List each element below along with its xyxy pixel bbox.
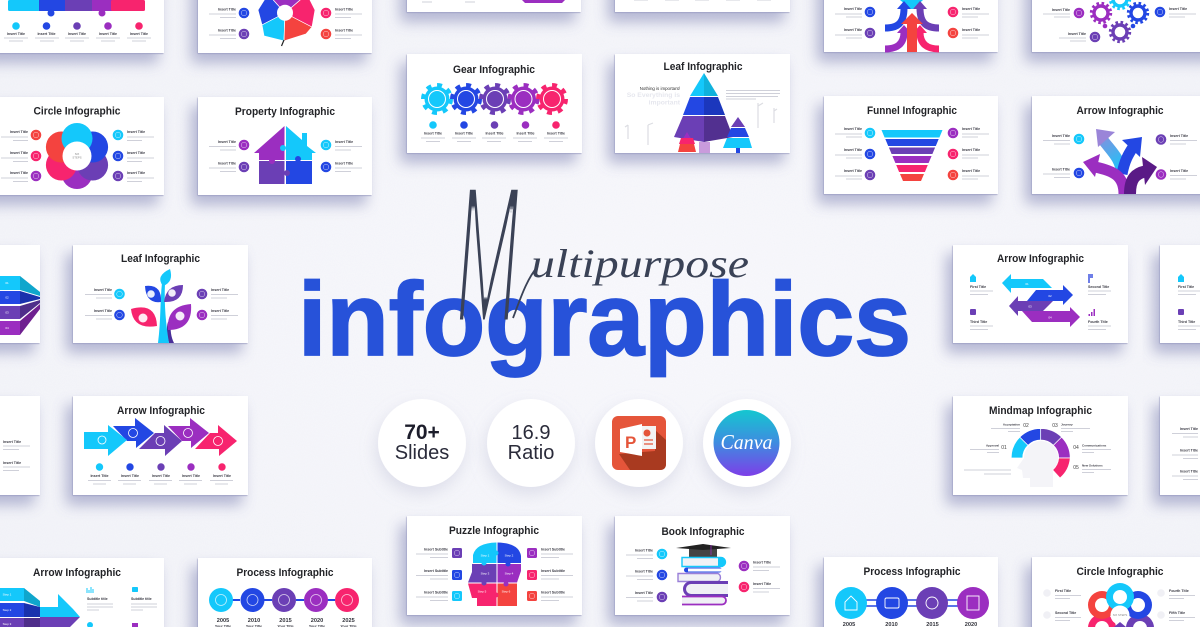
head silhouette xyxy=(1017,441,1058,487)
slide card xyxy=(1160,245,1200,343)
years: 2015 xyxy=(279,618,292,624)
callout text: So Everything is xyxy=(627,92,680,99)
panel: circle infographic slide xyxy=(0,97,164,195)
list items: Insert Title xyxy=(753,560,771,564)
slide card xyxy=(953,245,1128,343)
callout text: important xyxy=(649,100,681,106)
list items xyxy=(1,130,154,182)
panel: gears slide (top right corner) xyxy=(1032,0,1200,52)
panel: leaf (tree) infographic slide xyxy=(615,54,790,153)
slide card xyxy=(73,245,248,343)
list items: Insert Title xyxy=(635,570,653,574)
list items: Insert Title xyxy=(962,7,980,11)
list items: Insert Title xyxy=(962,28,980,32)
list items xyxy=(88,463,233,484)
gear row xyxy=(423,85,566,113)
heading: Arrow Infographic xyxy=(117,405,205,417)
list items xyxy=(421,121,568,142)
heading: Mindmap Infographic xyxy=(989,405,1092,417)
graduation cap xyxy=(676,544,731,557)
petal chart xyxy=(46,123,108,189)
corner items: Third Title xyxy=(970,320,987,324)
labels: 01 xyxy=(1001,445,1007,451)
labels: 04 xyxy=(1073,445,1079,451)
puzzle head: Step 1 xyxy=(481,554,490,558)
arrow flower: SIX STEPS xyxy=(1113,613,1127,617)
list items: Insert Title xyxy=(218,162,236,166)
labels xyxy=(964,422,1111,474)
list items: Insert Title xyxy=(335,28,353,32)
slide card xyxy=(198,97,372,195)
slide card xyxy=(1160,396,1200,495)
panel: property infographic slide xyxy=(198,97,372,195)
slide card xyxy=(407,0,581,12)
list items: Insert Title xyxy=(127,171,145,175)
years: 2010 xyxy=(248,618,260,624)
list items: Insert Title xyxy=(127,130,145,134)
list text: Insert Title xyxy=(3,461,21,465)
list items xyxy=(209,8,362,39)
list items: Insert Title xyxy=(213,474,231,478)
puzzle head: Step 3 xyxy=(481,572,490,576)
corner items: Second Title xyxy=(1088,285,1109,289)
stacked bands: 04 xyxy=(5,326,9,330)
opposing arrows xyxy=(1002,274,1080,327)
labels: Journey xyxy=(1061,422,1073,426)
caption lines xyxy=(634,0,771,1)
panel: 3D step fragment (left edge) xyxy=(0,245,40,343)
labels: Communications xyxy=(1082,444,1107,448)
list items: Fourth Title xyxy=(1169,589,1189,593)
opposing arrows: 01 xyxy=(1025,282,1029,286)
list items: Insert Title xyxy=(10,171,28,175)
slide card xyxy=(73,396,248,495)
list items: Insert Title xyxy=(1170,134,1188,138)
list items xyxy=(209,140,362,172)
badge: Canva icon xyxy=(703,399,791,487)
list items: Insert Title xyxy=(130,32,148,36)
process circles xyxy=(209,588,359,612)
heading: Leaf Infographic xyxy=(664,61,742,73)
list items: Insert Title xyxy=(10,130,28,134)
script capital: M xyxy=(456,148,520,361)
heading: Circle Infographic xyxy=(34,106,120,118)
heading: Property Infographic xyxy=(235,106,335,118)
petal chart: STEPS xyxy=(72,156,82,160)
list items: Insert Title xyxy=(962,127,980,131)
labels: Approval xyxy=(986,444,999,448)
petal chart: SIX xyxy=(75,152,79,156)
process circles xyxy=(835,587,989,619)
corner items: Fourth Title xyxy=(1088,320,1108,324)
labels: Acceptation xyxy=(1003,422,1020,426)
slide card xyxy=(824,96,998,194)
fork arrows xyxy=(1083,129,1157,194)
slide card xyxy=(0,396,40,495)
list items: First Title xyxy=(1055,589,1071,593)
list items xyxy=(85,288,238,320)
sub-items xyxy=(87,587,157,627)
list items: Insert Title xyxy=(218,28,236,32)
panel: puzzle infographic slide xyxy=(407,516,582,615)
list text: Insert Title xyxy=(1180,448,1198,452)
list items: Insert Title xyxy=(7,32,25,36)
square list items xyxy=(416,548,573,601)
panel: arrow slide fragment (right edge) xyxy=(1160,245,1200,343)
list text: Insert Title xyxy=(1180,427,1198,431)
list items xyxy=(835,7,989,38)
step arrow: Step 1 xyxy=(3,592,12,596)
years xyxy=(215,618,357,627)
callout text: Nothing is important/ xyxy=(640,86,681,91)
slide card xyxy=(0,245,40,343)
plant chart xyxy=(131,269,191,343)
labels: 05 xyxy=(1073,465,1079,471)
small left tree xyxy=(678,132,696,152)
small right tree xyxy=(723,117,752,153)
square list items: Insert Subtitle xyxy=(424,590,448,594)
converging arrows xyxy=(885,0,939,52)
panel: leaf infographic slide (plant) xyxy=(73,245,248,343)
step arrow xyxy=(0,588,80,627)
list items: Insert Title xyxy=(121,474,139,478)
list items: Insert Title xyxy=(1169,7,1187,11)
book stack xyxy=(678,558,728,604)
leaf wheel chart xyxy=(258,0,315,46)
labels: 03 xyxy=(1052,423,1058,429)
opposing arrows: 02 xyxy=(1048,294,1052,298)
heading: Funnel Infographic xyxy=(867,105,957,117)
heading: Process Infographic xyxy=(236,567,334,579)
house puzzle xyxy=(254,126,316,184)
panel: arrows-up slide (top right) xyxy=(824,0,998,52)
years: 2025 xyxy=(342,618,355,624)
list items: Insert Title xyxy=(1068,32,1086,36)
puzzle head: Step 6 xyxy=(502,590,511,594)
badge: 16.9 ratio: Ratio xyxy=(508,442,554,464)
badge: 16.9 ratio xyxy=(487,399,575,487)
corner items xyxy=(970,274,1111,330)
list items: Insert Title xyxy=(1052,168,1070,172)
panel: puzzle row slide (top left) xyxy=(0,0,164,53)
badge: 70+ slides xyxy=(378,399,466,487)
list items: Insert Title xyxy=(211,288,229,292)
square list items: Insert Subtitle xyxy=(424,548,448,552)
list items: Insert Title xyxy=(844,148,862,152)
opposing arrows: 04 xyxy=(1048,316,1052,320)
list items: Insert Title xyxy=(1052,8,1070,12)
heading: Arrow Infographic xyxy=(1076,105,1164,117)
purple shape xyxy=(522,0,565,3)
list items xyxy=(1043,7,1196,42)
list items: Insert Title xyxy=(90,474,109,478)
list items: Insert Title xyxy=(94,309,112,313)
heading: Puzzle Infographic xyxy=(449,525,539,537)
list items: Insert Title xyxy=(335,8,353,12)
panel: arrow infographic slide (bottom left) xyxy=(0,558,164,627)
list items: Insert Title xyxy=(94,288,112,292)
heading: Arrow Infographic xyxy=(33,567,121,579)
list items: Insert Title xyxy=(516,132,535,136)
slide card xyxy=(1032,557,1200,627)
slide card xyxy=(615,54,790,153)
panel: funnel infographic slide xyxy=(824,96,998,194)
list items: Insert Title xyxy=(962,169,980,173)
heading: Process Infographic xyxy=(864,566,960,578)
list items: Insert Title xyxy=(127,151,145,155)
panel: circle infographic slide (arrows) xyxy=(1032,557,1200,627)
square list items: Insert Subtitle xyxy=(541,590,565,594)
slide card xyxy=(824,0,998,52)
heading: Book Infographic xyxy=(662,526,744,538)
slide card xyxy=(407,54,582,153)
list items: Insert Title xyxy=(455,132,473,136)
list items: Insert Title xyxy=(10,151,28,155)
panel: leaf wheel slide (top) xyxy=(198,0,372,53)
slide card xyxy=(198,558,372,627)
list items: Insert Title xyxy=(753,582,771,586)
icon: PowerPoint tile: P xyxy=(625,433,636,452)
wind turbines xyxy=(625,103,777,145)
main heading: infographics: infographics xyxy=(298,262,911,378)
list items: Insert Title xyxy=(844,169,862,173)
puzzle head xyxy=(468,542,521,606)
labels: New Solutions xyxy=(1082,464,1103,468)
badge: PowerPoint icon xyxy=(595,399,683,487)
list items: Insert Title xyxy=(547,132,565,136)
list items xyxy=(1043,134,1197,180)
step arrow: Step 3 xyxy=(3,622,12,626)
slide card xyxy=(824,557,998,627)
heading: Gear Infographic xyxy=(453,64,535,76)
slide card xyxy=(953,396,1128,495)
stacked bands xyxy=(0,276,40,335)
large tree xyxy=(674,73,733,153)
list items: Insert Title xyxy=(635,548,653,552)
panel: arrow infographic slide (chevrons) xyxy=(73,396,248,495)
heading: Leaf Infographic xyxy=(121,253,200,265)
corner items: First Title xyxy=(1178,285,1194,289)
funnel chart xyxy=(882,130,942,181)
script remainder: ultipurpose xyxy=(531,241,749,286)
puzzle head: Step 5 xyxy=(478,590,487,594)
list items: Insert Title xyxy=(211,309,229,313)
puzzle row xyxy=(8,0,145,16)
sub-items: Subtitle title xyxy=(87,597,108,601)
slide card xyxy=(0,97,164,195)
list items: Insert Title xyxy=(218,8,236,12)
corner items: Third Title xyxy=(1178,320,1195,324)
panel: top centre slide fragment xyxy=(407,0,581,12)
list text: Insert Title xyxy=(3,440,21,444)
list items: Insert Title xyxy=(335,162,353,166)
heading: Circle Infographic xyxy=(1076,566,1164,578)
puzzle head: Step 4 xyxy=(505,572,514,576)
sub-items: Subtitle title xyxy=(131,597,152,601)
list items: Insert Title xyxy=(844,28,862,32)
slide card xyxy=(1032,96,1200,194)
list items: Insert Title xyxy=(335,140,353,144)
puzzle head: Step 2 xyxy=(505,554,514,558)
list items: Insert Title xyxy=(37,32,56,36)
slide card xyxy=(1032,0,1200,52)
description lines xyxy=(726,90,780,99)
list items: Insert Title xyxy=(424,132,442,136)
slide card xyxy=(0,558,164,627)
main heading: script word xyxy=(456,148,749,361)
caption lines xyxy=(422,1,475,3)
stacked bands: 03 xyxy=(5,310,9,314)
slide card xyxy=(407,516,582,615)
list items: Insert Title xyxy=(1052,134,1070,138)
years: 2020 xyxy=(311,618,323,624)
panel: book infographic slide xyxy=(615,516,790,615)
panel: process infographic slide (four steps) xyxy=(824,557,998,627)
list items: Insert Title xyxy=(1170,169,1188,173)
list items: Insert Title xyxy=(485,132,504,136)
list items: Insert Title xyxy=(152,474,170,478)
panel: arrow infographic slide (fork) xyxy=(1032,96,1200,194)
badge: Canva icon: Canva xyxy=(720,430,772,454)
chevron arrows xyxy=(84,418,237,456)
list items: Insert Title xyxy=(182,474,200,478)
labels: 02 xyxy=(1023,423,1029,429)
semicircle segments xyxy=(1011,428,1070,478)
heading: Arrow Infographic xyxy=(997,253,1084,265)
list text xyxy=(3,440,30,470)
panel: top centre right slide fragment xyxy=(615,0,790,12)
list items xyxy=(1043,589,1195,620)
square list items: Insert Subtitle xyxy=(541,569,565,573)
panel: mindmap infographic slide xyxy=(953,396,1128,495)
panel: text fragment (right edge) xyxy=(1160,396,1200,495)
connecting flourish xyxy=(513,266,538,318)
list items: Second Title xyxy=(1055,611,1076,615)
panel: text fragment (left edge) xyxy=(0,396,40,495)
list items xyxy=(4,22,151,41)
corner items: First Title xyxy=(970,285,986,289)
square list items: Insert Subtitle xyxy=(541,548,565,552)
stacked bands: 02 xyxy=(5,296,9,300)
badge: 16.9 ratio: 16.9 xyxy=(512,422,550,444)
panel: arrow infographic slide (opposing arrows) xyxy=(953,245,1128,343)
slide card xyxy=(0,0,164,53)
list items: Insert Title xyxy=(99,32,117,36)
slide card xyxy=(615,516,790,615)
gears xyxy=(1092,0,1148,42)
arrow flower xyxy=(1088,583,1154,627)
list items: Fifth Title xyxy=(1169,611,1185,615)
years: 2005 xyxy=(217,618,229,624)
stacked bands: 01 xyxy=(5,281,9,285)
list items: Insert Title xyxy=(68,32,86,36)
list items: Insert Title xyxy=(844,7,862,11)
square list items: Insert Subtitle xyxy=(424,569,448,573)
opposing arrows: 03 xyxy=(1028,304,1032,308)
list text: Insert Title xyxy=(1180,470,1198,474)
badge: 70+ slides: 70+ xyxy=(404,421,440,444)
callout text xyxy=(627,86,681,106)
years xyxy=(843,622,977,627)
list items: Insert Title xyxy=(218,140,236,144)
list text xyxy=(1172,427,1198,480)
list items xyxy=(835,127,989,180)
slide card xyxy=(198,0,372,53)
list items: Insert Title xyxy=(635,591,653,595)
step arrow: Step 2 xyxy=(3,608,12,612)
list items xyxy=(626,548,780,602)
badge: 70+ slides: Slides xyxy=(395,442,449,464)
list items: Insert Title xyxy=(844,127,862,131)
panel: process infographic slide (five steps) xyxy=(198,558,372,627)
slide card xyxy=(615,0,790,12)
panel: gear infographic slide xyxy=(407,54,582,153)
list items: Insert Title xyxy=(962,148,980,152)
corner items xyxy=(1178,274,1200,330)
